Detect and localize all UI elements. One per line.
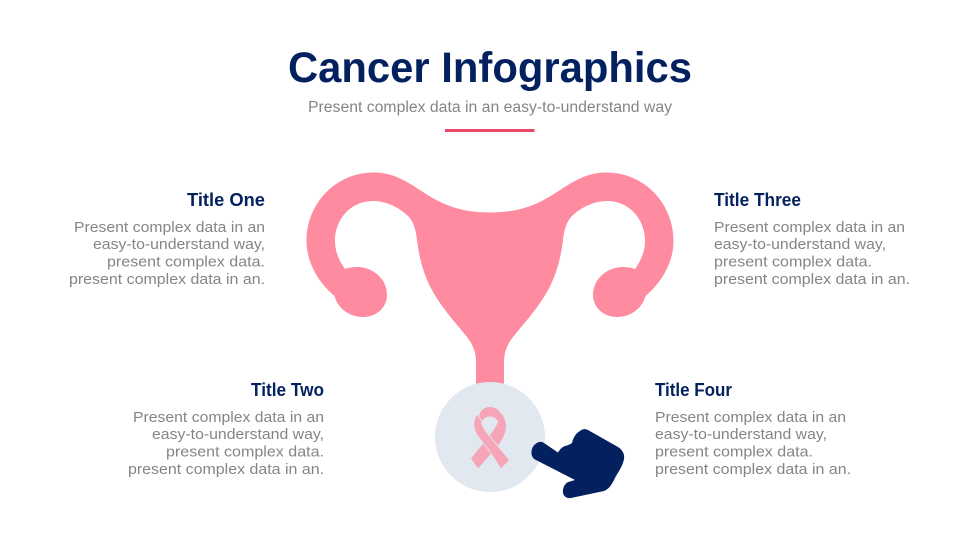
text block: Title Three (714, 189, 910, 288)
text block: Title Three: easy-to-understand way, (714, 236, 886, 253)
text block: Title Four: present complex data in an. (655, 461, 851, 478)
text block: Title One: Title One (187, 189, 265, 210)
text block: Title Four: Present complex data in an (655, 409, 846, 426)
text block: Title Two: easy-to-understand way, (152, 426, 324, 443)
text block: Title Four: easy-to-understand way, (655, 426, 827, 443)
circle badge (435, 382, 545, 492)
text block: Title Four (655, 379, 851, 478)
text block: Title One: Present complex data in an (74, 219, 265, 236)
text block: Title Two (128, 379, 324, 478)
text block: Title One (69, 189, 265, 288)
text block: Title Two: present complex data. (166, 444, 324, 460)
uterus illustration (306, 172, 674, 384)
text block: Title Four: Title Four (655, 379, 732, 400)
text block: Title One: easy-to-understand way, (93, 236, 265, 253)
text block: Title Two: Present complex data in an (133, 409, 324, 426)
text block: Title Four: present complex data. (655, 444, 813, 460)
text block: Title One: present complex data. (107, 254, 265, 270)
title underline (445, 129, 534, 132)
text block: Title Two: Title Two (251, 379, 324, 400)
subtitle: Present complex data in an easy-to-understand way (308, 99, 672, 116)
icon: awareness ribbon (471, 407, 510, 469)
icon: pointing hand (531, 429, 624, 498)
text block: Title Three: present complex data in an. (714, 271, 910, 288)
title: Cancer Infographics (288, 44, 692, 92)
text block: Title One: present complex data in an. (69, 271, 265, 288)
text block: Title Two: present complex data in an. (128, 461, 324, 478)
text block: Title Three: Present complex data in an (714, 219, 905, 236)
text block: Title Three: Title Three (714, 189, 801, 210)
text block: Title Three: present complex data. (714, 254, 872, 270)
